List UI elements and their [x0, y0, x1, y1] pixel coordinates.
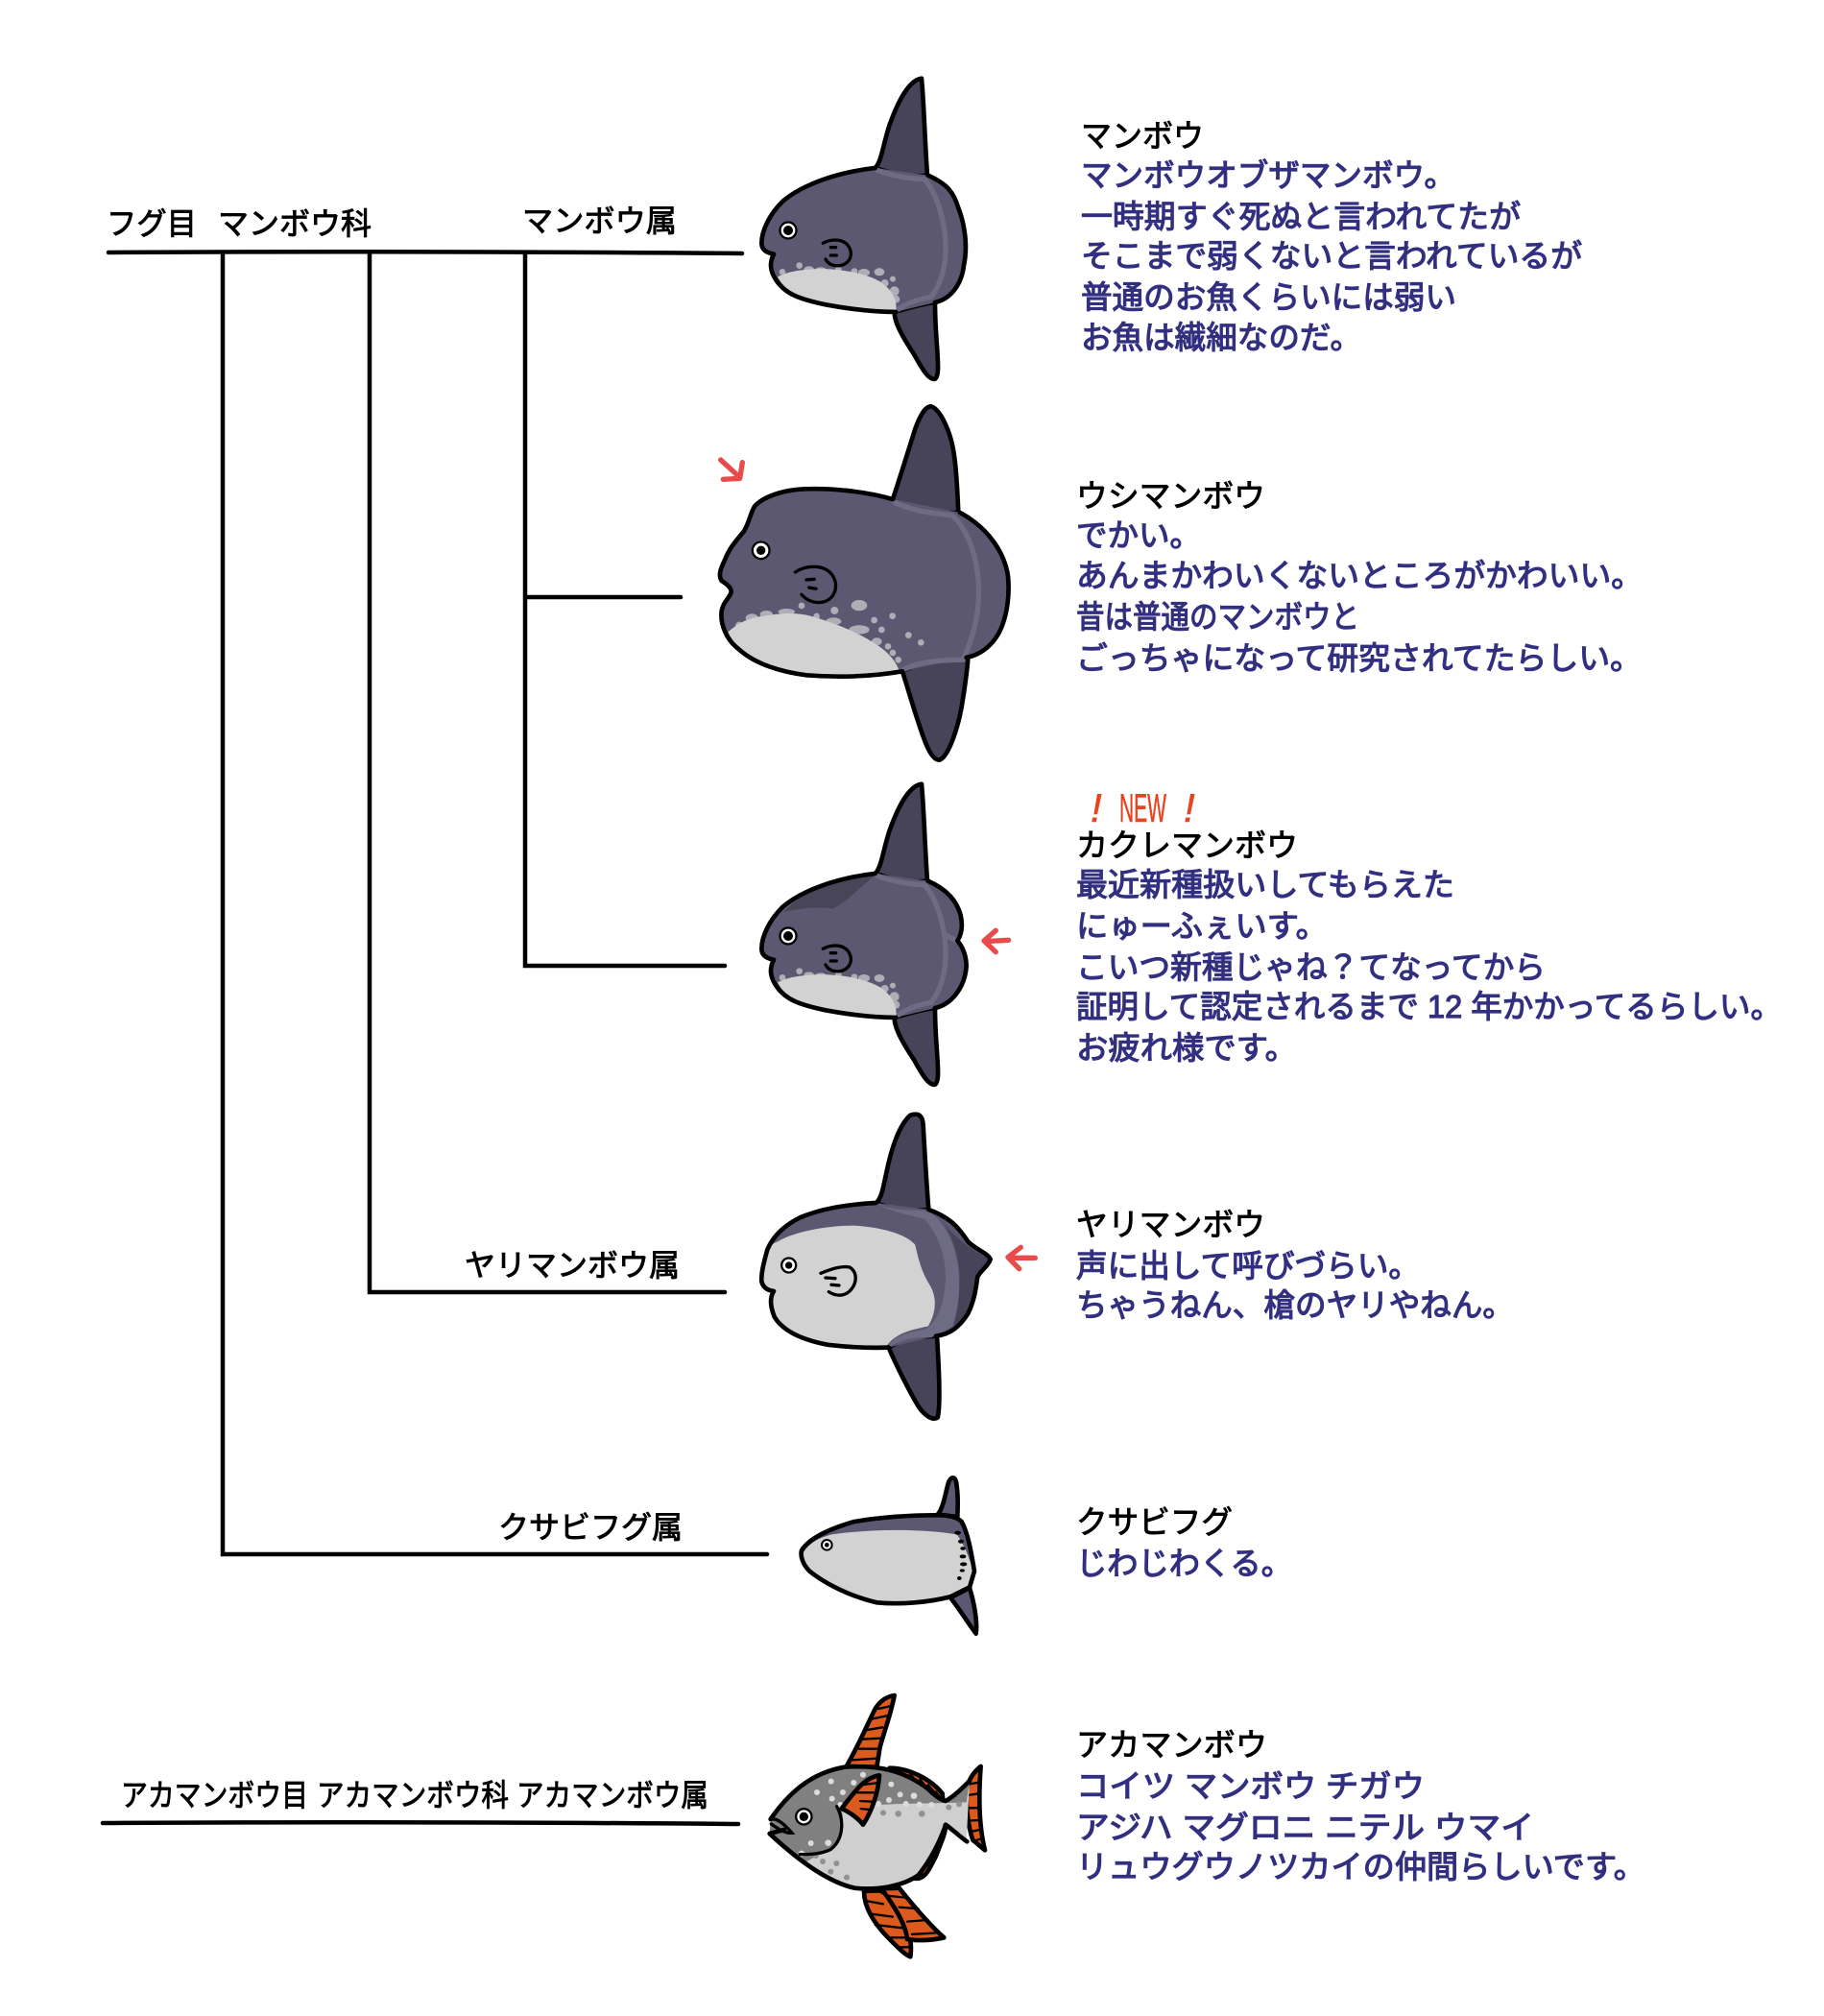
- description: bump-head sunfish: あんまかわいくないところがかわいい。: [1076, 558, 1643, 593]
- description: hoodwinker sunfish: カクレマンボウ: [1076, 828, 1298, 863]
- description: bump-head sunfish: ウシマンボウ: [1076, 478, 1265, 514]
- description: sharptail sunfish: ちゃうねん、槍のヤリやねん。: [1076, 1287, 1514, 1323]
- description: bump-head sunfish: ごっちゃになって研究されてたらしい。: [1076, 640, 1642, 676]
- fish: opah: [770, 1695, 985, 1956]
- description: ocean sunfish: 普通のお魚くらいには弱い: [1081, 279, 1456, 315]
- description: slender sunfish: クサビフグ: [1076, 1504, 1233, 1540]
- label: Ranzania genus: クサビフグ属: [498, 1510, 683, 1545]
- description: hoodwinker sunfish: [1076, 785, 1782, 1066]
- description: ocean sunfish: 一時期すぐ死ぬと言われてたが: [1081, 199, 1521, 234]
- new badge: [1091, 785, 1195, 830]
- label: order and family: [107, 206, 372, 241]
- fish: ocean sunfish: [761, 79, 966, 379]
- description: slender sunfish: じわじわくる。: [1076, 1546, 1292, 1581]
- description: hoodwinker sunfish: 証明して認定されるまで 12 年かかってるらしい。: [1076, 989, 1782, 1024]
- arrow: hoodwinker tail notch: [984, 930, 1009, 952]
- fish: sharptail sunfish: [761, 1115, 991, 1419]
- description: sharptail sunfish: 声に出して呼びづらい。: [1076, 1248, 1420, 1284]
- description: bump-head sunfish: でかい。: [1076, 517, 1201, 553]
- arrow: bump sunfish forehead: [721, 460, 742, 479]
- label: order and family: マンボウ科: [218, 206, 372, 241]
- description: opah: コイツ マンボウ チガウ: [1076, 1768, 1425, 1804]
- description: hoodwinker sunfish: お疲れ様です。: [1076, 1030, 1297, 1066]
- description: ocean sunfish: そこまで弱くないと言われているが: [1081, 238, 1582, 274]
- description: bump-head sunfish: 昔は普通のマンボウと: [1076, 599, 1359, 635]
- arrow: sharptail tail: [1008, 1247, 1035, 1269]
- fish: hoodwinker sunfish: [761, 784, 967, 1085]
- label: opah classification: アカマンボウ目: [121, 1778, 308, 1812]
- new badge: !: [1184, 785, 1195, 830]
- tree line: opah: [103, 1822, 738, 1824]
- description: hoodwinker sunfish: にゅーふぇいす。: [1076, 908, 1328, 944]
- description: ocean sunfish: マンボウ: [1081, 118, 1204, 154]
- description: sharptail sunfish: ヤリマンボウ: [1076, 1207, 1265, 1242]
- fish: bump-head sunfish: [720, 406, 1009, 760]
- tree diagram: sunfish family: [108, 252, 767, 1554]
- label: order and family: フグ目: [107, 206, 197, 241]
- description: bump-head sunfish: [1076, 478, 1643, 676]
- label: Masturus genus: ヤリマンボウ属: [465, 1248, 680, 1283]
- opah fins: [847, 1695, 985, 1956]
- description: opah: アジハ マグロニ ニテル ウマイ: [1076, 1810, 1534, 1845]
- description: hoodwinker sunfish: こいつ新種じゃね？てなってから: [1076, 949, 1546, 985]
- description: slender sunfish: [1076, 1504, 1292, 1581]
- description: opah: [1076, 1727, 1645, 1884]
- description: ocean sunfish: [1081, 118, 1582, 355]
- fish: slender sunfish: [802, 1477, 976, 1634]
- description: ocean sunfish: マンボウオブザマンボウ。: [1081, 157, 1455, 193]
- description: opah: リュウグウノツカイの仲間らしいです。: [1076, 1849, 1645, 1884]
- description: sharptail sunfish: [1076, 1207, 1514, 1323]
- label: opah classification: アカマンボウ属: [516, 1778, 708, 1812]
- new badge: !: [1091, 785, 1102, 830]
- label: opah classification: [121, 1778, 708, 1812]
- description: opah: アカマンボウ: [1076, 1727, 1267, 1763]
- label: opah classification: アカマンボウ科: [317, 1778, 509, 1812]
- label: Mola genus: マンボウ属: [522, 204, 677, 238]
- description: ocean sunfish: お魚は繊細なのだ。: [1081, 320, 1361, 355]
- description: hoodwinker sunfish: 最近新種扱いしてもらえた: [1076, 867, 1454, 902]
- new badge: NEW: [1119, 785, 1166, 830]
